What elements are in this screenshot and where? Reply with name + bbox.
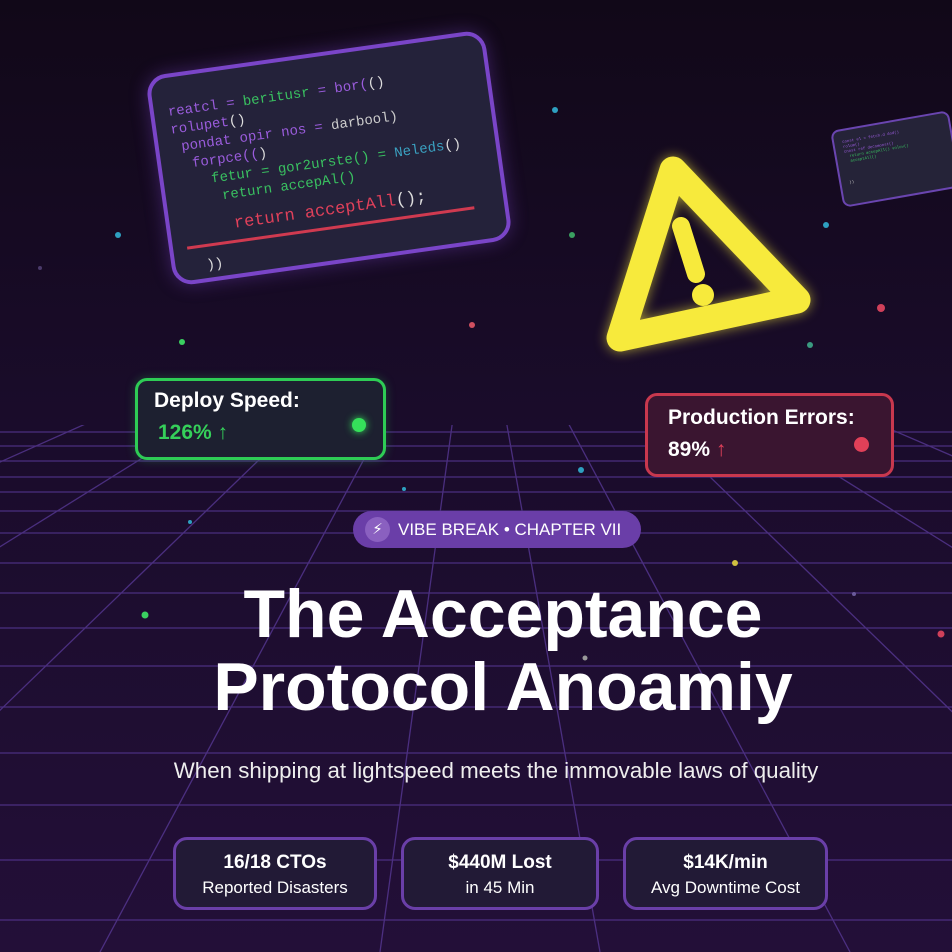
card: deploy speed: 126% ↑ [158, 421, 228, 444]
code panel: fetur = gor2urste() = Neleds() [210, 137, 462, 187]
stat: downtime: $14K/min [683, 852, 768, 873]
card: production errors: 89% ↑ [668, 438, 726, 461]
small code card: const el = fetch.d dod() [842, 131, 899, 145]
subtitle: When shipping at lightspeed meets the immovable laws of quality [174, 758, 818, 783]
card: production errors [645, 393, 894, 477]
stat: downtime [623, 837, 828, 910]
card: deploy speed [135, 378, 386, 460]
icon: warning triangle [598, 148, 818, 360]
small code card: acceptAll() [850, 155, 877, 164]
code panel: forpce(() [191, 146, 268, 172]
title: Protocol Anoamiy [213, 649, 793, 725]
stat: lost [401, 837, 599, 910]
code panel: rolupet() [170, 112, 247, 139]
badge: VIBE BREAK • CHAPTER VII [398, 520, 621, 539]
stat: CTOs: Reported Disasters [202, 878, 348, 897]
title: The Acceptance [244, 576, 762, 652]
code panel: return acceptAll(); [233, 188, 428, 234]
card: deploy speed: Deploy Speed: [154, 389, 300, 412]
icon: bolt [365, 517, 390, 542]
small code card: )) [849, 181, 855, 185]
small code card: rolum() [843, 143, 860, 150]
stat: CTOs [173, 837, 377, 910]
code panel: pondat opir nos = darbool) [180, 109, 399, 155]
small code card [830, 110, 952, 208]
title [213, 576, 793, 725]
stat: lost: $440M Lost [448, 852, 552, 873]
stat: CTOs: 16/18 CTOs [223, 852, 327, 873]
badge [353, 511, 641, 548]
code panel [145, 29, 513, 287]
card: production errors: Production Errors: [668, 406, 855, 429]
stat: downtime: Avg Downtime Cost [651, 878, 800, 897]
code panel: return accepAl() [221, 170, 357, 204]
small code card: return accepAll() vnlov() [849, 145, 909, 159]
code panel: reatcl = beritusr = bor(() [167, 75, 386, 121]
icon: bolt: ⚡︎ [372, 521, 383, 538]
stat: lost: in 45 Min [466, 878, 534, 897]
small code card: cnnst ref decomonst() [844, 142, 894, 155]
code panel: )) [206, 256, 224, 274]
